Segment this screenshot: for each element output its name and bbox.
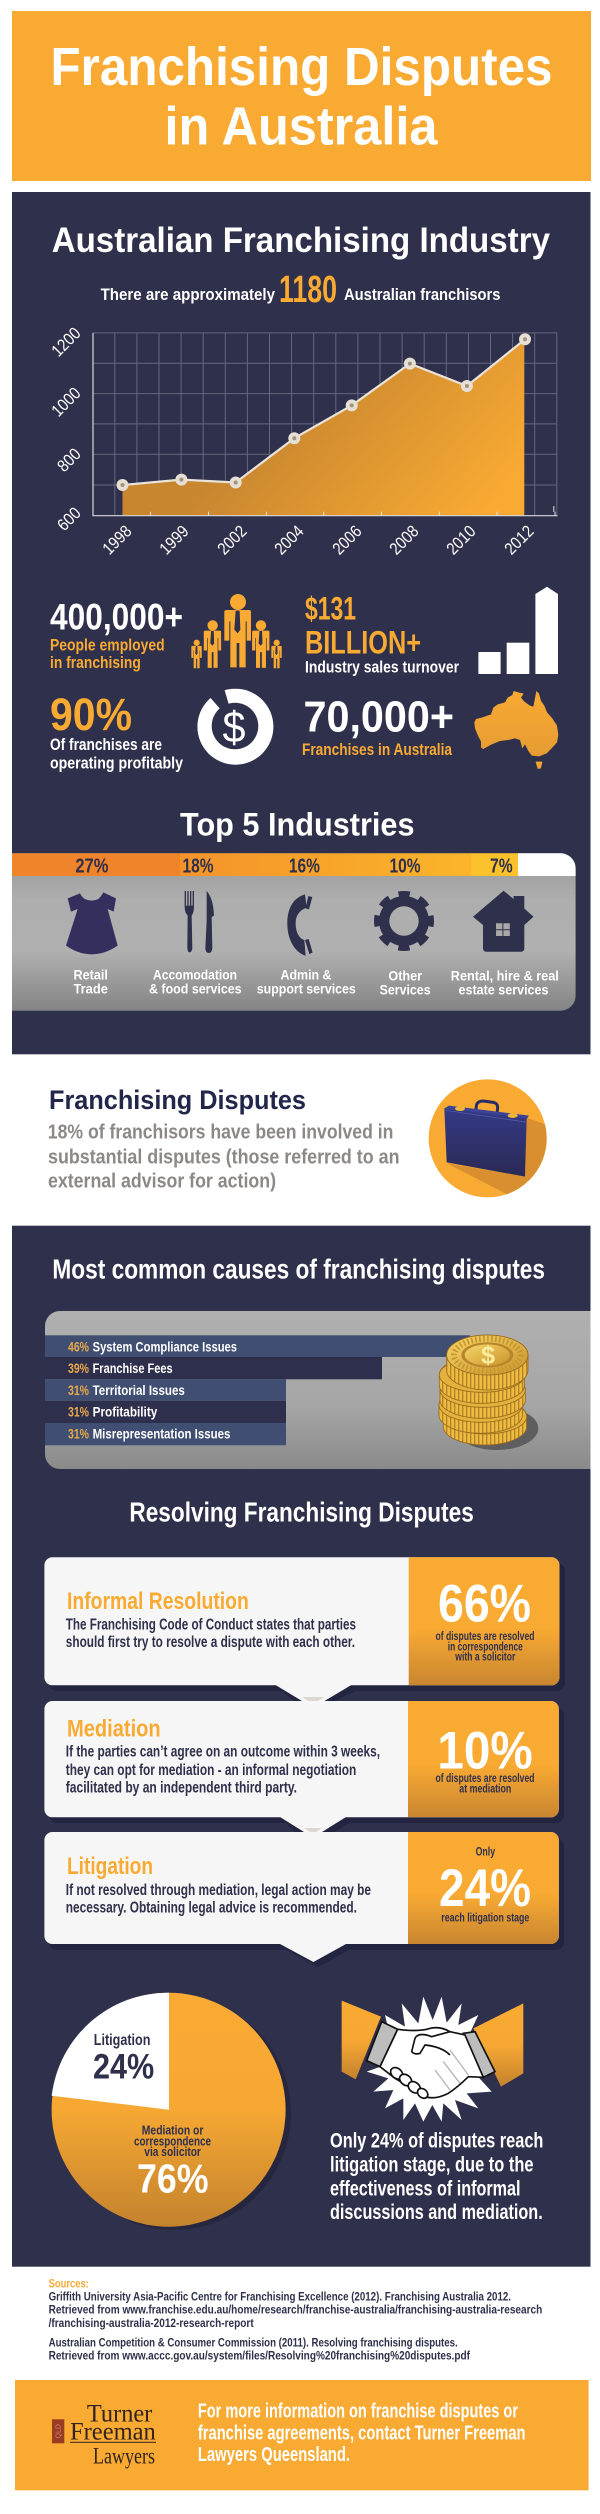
icon: rising bars: [478, 587, 558, 674]
icon: dollar ring: $: [222, 703, 246, 752]
icon: coin stack: $: [481, 1342, 495, 1370]
stat: profitable: Of franchises are: [50, 736, 162, 754]
pie chart: 76%: [137, 2156, 209, 2202]
area chart: 1999: [156, 522, 192, 558]
stat: people employed: People employed: [50, 637, 165, 655]
area chart: 2008: [386, 522, 422, 558]
franchisor count: Australian franchisors: [344, 285, 500, 304]
stat: people employed: [50, 596, 183, 672]
panel: disputes causes and resolution: [12, 1226, 590, 2267]
footer banner: [15, 2380, 589, 2490]
card: informal resolution: The Franchising Code of Conduct states that parties: [66, 1616, 356, 1633]
contact text: Lawyers Queensland.: [198, 2444, 350, 2466]
intro text: external advisor for action): [48, 1170, 276, 1192]
area chart: 2004: [271, 522, 307, 558]
stat: franchises: Franchises in Australia: [302, 741, 453, 759]
card: litigation: necessary. Obtaining legal advice is recommended.: [66, 1899, 357, 1916]
title: [50, 37, 552, 157]
sources: Retrieved from www.franchise.edu.au/home/research/franchise-australia/franchising-australia-research: [49, 2305, 542, 2317]
area chart: 2010: [443, 522, 479, 558]
card: mediation: Mediation: [67, 1716, 161, 1743]
logo: Turner Freeman Lawyers: [52, 2401, 156, 2468]
icon: cutlery: [185, 891, 214, 953]
card: litigation: reach litigation stage: [441, 1910, 530, 1924]
causes chart: Misrepresentation Issues: [93, 1426, 231, 1442]
industry labels: estate services: [458, 981, 549, 997]
stat: profitable: [50, 689, 184, 772]
industry labels: Retail: [74, 966, 108, 982]
icon: dress: [66, 892, 118, 954]
franchisor count: There are approximately: [101, 285, 275, 304]
intro text: substantial disputes (those referred to an: [48, 1146, 400, 1168]
pie chart: 24%: [93, 2047, 154, 2086]
sources: Griffith University Asia-Pacific Centre for Franchising Excellence (2012). Franchising Australia 2012.: [49, 2291, 511, 2303]
percentage band: 27%: [75, 856, 109, 878]
stat: sales turnover: [305, 590, 459, 677]
pie chart: Litigation: [94, 2032, 150, 2049]
heading: top 5 industries: Top 5 Industries: [180, 807, 414, 843]
pie chart: correspondence: [134, 2133, 211, 2148]
icon: coin stack: [439, 1335, 538, 1450]
area chart: 2012: [501, 522, 537, 558]
causes chart: Territorial Issues: [93, 1382, 185, 1398]
card: mediation: they can opt for mediation - an informal negotiation: [66, 1762, 356, 1779]
area chart: 2002: [214, 522, 250, 558]
title: Franchising Disputes: [50, 37, 552, 97]
industry labels: Accomodation: [153, 966, 237, 982]
logo: Turner Freeman Lawyers: Turner: [87, 2401, 153, 2428]
logo: Turner Freeman Lawyers: Lawyers: [93, 2443, 155, 2468]
sources: [49, 2279, 542, 2362]
card: mediation: at mediation: [459, 1781, 511, 1795]
icon: briefcase: [428, 1079, 547, 1198]
handshake caption: Only 24% of disputes reach: [330, 2129, 543, 2152]
sources: Sources:: [49, 2279, 89, 2291]
card: litigation: Litigation: [67, 1853, 153, 1880]
card: litigation: [44, 1832, 564, 1967]
title banner: [12, 11, 591, 181]
area chart: 2006: [329, 522, 365, 558]
handshake caption: litigation stage, due to the: [330, 2154, 534, 2177]
stat: profitable: 90%: [50, 689, 132, 740]
card: informal resolution: with a solicitor: [455, 1650, 516, 1664]
stat: profitable: operating profitably: [50, 754, 184, 772]
causes chart: [45, 1311, 590, 1469]
area chart: 1200: [48, 324, 84, 360]
handshake caption: effectiveness of informal: [330, 2177, 520, 2200]
panel: top 5 industries: [12, 853, 576, 1011]
heading: Franchising Disputes: [49, 1085, 306, 1115]
logo: Turner Freeman Lawyers: Freeman: [70, 2418, 156, 2445]
section: franchising disputes intro: [48, 1079, 565, 1198]
card: mediation: 10%: [437, 1721, 533, 1780]
industry labels: Other: [388, 968, 423, 984]
contact text: [198, 2400, 526, 2466]
sources: Retrieved from www.accc.gov.au/system/files/Resolving%20franchising%20disputes.pdf: [49, 2350, 470, 2362]
area chart: 600: [54, 504, 85, 535]
causes chart: 31%: [68, 1382, 89, 1398]
percentage band: 16%: [289, 856, 320, 878]
card: informal resolution: Informal Resolution: [67, 1588, 249, 1615]
heading: resolving disputes: Resolving Franchising Disputes: [129, 1497, 474, 1528]
industry labels: Services: [380, 981, 431, 997]
causes chart: 31%: [68, 1426, 89, 1442]
stat: sales turnover: $131: [305, 590, 356, 626]
handshake caption: discussions and mediation.: [330, 2201, 543, 2224]
title: in Australia: [164, 97, 438, 157]
handshake caption: [330, 2129, 543, 2224]
heading: Australian Franchising Industry: [52, 221, 550, 260]
card: informal resolution: in correspondence: [448, 1640, 523, 1654]
card: informal resolution: 66%: [438, 1575, 531, 1634]
icon: house: [473, 891, 534, 952]
card: mediation: of disputes are resolved: [436, 1771, 534, 1785]
card: informal resolution: of disputes are resolved: [436, 1629, 534, 1643]
causes chart: System Compliance Issues: [93, 1339, 237, 1355]
area chart: 1000: [48, 384, 84, 420]
icon: telephone: [287, 894, 313, 956]
stat: people employed: 400,000+: [50, 596, 183, 637]
area chart: 1998: [99, 522, 135, 558]
icon: Australia map: [474, 691, 558, 769]
stat: people employed: in franchising: [50, 654, 141, 672]
intro text: 18% of franchisors have been involved in: [48, 1121, 393, 1143]
intro text: [48, 1121, 400, 1192]
industry labels: Rental, hire & real: [451, 968, 559, 984]
icon: people: [191, 594, 282, 668]
stat: sales turnover: BILLION+: [305, 624, 421, 660]
franchisor count: [101, 269, 500, 311]
panel: Australian franchising industry: [12, 192, 590, 1054]
percentage band: [12, 853, 576, 878]
percentage band: 7%: [490, 856, 513, 878]
icon: dollar ring: [197, 688, 273, 765]
logo: Turner Freeman Lawyers: QLD: [56, 2424, 62, 2439]
franchisor count: 1180: [279, 269, 337, 311]
causes chart: 39%: [68, 1360, 89, 1376]
industry labels: support services: [257, 980, 356, 996]
area chart: [48, 324, 558, 558]
card: litigation: 24%: [439, 1859, 531, 1918]
pie chart: via solicitor: [144, 2144, 201, 2159]
card: mediation: facilitated by an independent third party.: [66, 1780, 297, 1797]
icon: handshake: [342, 1997, 523, 2122]
card: informal resolution: [44, 1557, 565, 1706]
percentage band: 10%: [390, 856, 421, 878]
card: litigation: If not resolved through mediation, legal action may be: [66, 1882, 371, 1899]
icon: gear: [377, 894, 431, 948]
card: mediation: If the parties can’t agree on an outcome within 3 weeks,: [66, 1744, 380, 1761]
percentage band: 18%: [182, 856, 214, 878]
pie chart: [52, 1993, 291, 2230]
stat: franchises: 70,000+: [304, 693, 454, 742]
card: litigation: Only: [476, 1845, 495, 1859]
sources: Australian Competition & Consumer Commission (2011). Resolving franchising disputes.: [49, 2337, 458, 2349]
causes chart: Franchise Fees: [93, 1360, 173, 1376]
industry labels: Trade: [74, 980, 108, 996]
sources: /franchising-australia-2012-research-report: [49, 2318, 254, 2330]
stat: sales turnover: Industry sales turnover: [305, 659, 459, 677]
causes chart: 46%: [68, 1339, 89, 1355]
card: mediation: [44, 1701, 564, 1837]
stat: franchises: [302, 693, 454, 759]
pie chart: Mediation or: [142, 2123, 203, 2138]
card: informal resolution: should first try to resolve a dispute with each other.: [66, 1634, 355, 1651]
industry labels: & food services: [149, 980, 242, 996]
causes chart: 31%: [68, 1403, 89, 1419]
causes chart: Profitability: [93, 1403, 157, 1419]
industry labels: Admin &: [280, 966, 332, 982]
industry labels: [74, 966, 559, 997]
area chart: 800: [54, 445, 85, 476]
